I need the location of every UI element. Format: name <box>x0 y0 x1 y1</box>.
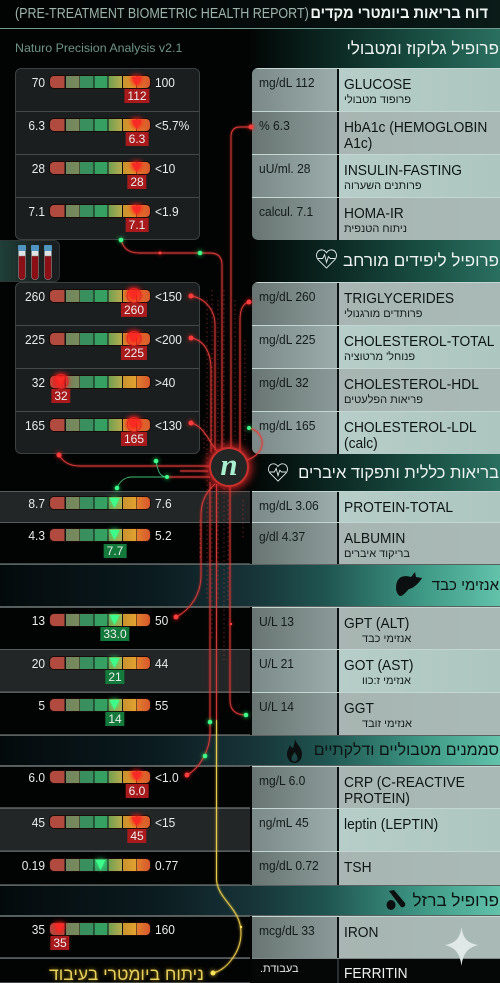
gauge: triglycerides: 260 <box>25 289 45 304</box>
row: GGT: GGT <box>344 701 374 717</box>
row: GGT: U/L 14 <box>259 699 294 714</box>
section header: lipids: פרופיל ליפידים מורחב <box>343 251 499 270</box>
gauge: HOMA-IR <box>28 200 179 232</box>
gauge: HDL <box>16 369 199 412</box>
gauge: leptin: 45 <box>32 815 45 830</box>
table: liver results <box>252 607 500 735</box>
row: protein <box>252 491 500 523</box>
row: LDL: (calc) <box>344 436 378 452</box>
row: albumin <box>252 522 500 564</box>
row: LDL: mg/dL 165 <box>259 418 315 433</box>
section header: general health and organ function: בריאות כללית ותפקוד איברים <box>298 464 499 482</box>
row: HOMA-IR: HOMA-IR <box>344 206 404 222</box>
row: GOT <box>252 649 500 692</box>
gauge: HDL: >40 <box>155 375 175 390</box>
row: GOT: אנזימי ז:כוו <box>362 675 411 687</box>
row: HOMA-IR <box>252 197 500 240</box>
row: total cholesterol: mg/dL 225 <box>259 332 315 347</box>
gauge: leptin: <15 <box>155 815 175 830</box>
section header: metabolic and inflammatory markers: סממנים מטבוליים ודלקתיים <box>314 742 499 759</box>
row: total cholesterol: CHOLESTEROL-TOTAL <box>344 334 494 350</box>
row: albumin: g/dl 4.37 <box>259 529 305 544</box>
gauge: total cholesterol <box>16 326 199 369</box>
gauge: HOMA-IR: 7.1 <box>129 218 145 232</box>
gauge: HDL: 32 <box>32 375 45 390</box>
gauge: albumin <box>0 522 250 564</box>
subtitle: Naturo Precision Analysis v2.1 <box>15 41 182 55</box>
gauge: CRP: 6.0 <box>28 770 45 785</box>
gauge: protein total <box>0 491 250 523</box>
row: CRP <box>252 766 500 808</box>
row: CRP: mg/L 6.0 <box>259 773 305 788</box>
connector dots: red <box>56 124 254 778</box>
row: iron: IRON <box>344 925 378 941</box>
gauge: triglycerides: <150 <box>155 289 182 304</box>
gauge: albumin: 5.2 <box>155 528 172 543</box>
gauge: insulin: 28 <box>32 161 45 176</box>
gauge: GGT <box>0 692 250 735</box>
row: protein: mg/dL 3.06 <box>259 498 319 513</box>
row: GPT <box>252 607 500 650</box>
hub: naturo n logo: n <box>220 447 238 482</box>
gauge: HDL: 32 <box>54 389 68 403</box>
icon: heart pulse <box>268 463 288 482</box>
row: iron <box>252 916 500 958</box>
gauge: leptin <box>0 808 250 851</box>
gauge: CRP: <1.0 <box>155 770 179 785</box>
row: GPT: GPT (ALT) <box>344 616 409 632</box>
row: protein: PROTEIN-TOTAL <box>344 500 453 516</box>
icon: test tubes <box>386 890 406 910</box>
row: albumin: ALBUMIN <box>344 531 405 547</box>
gauge: protein total: 8.7 <box>28 496 45 511</box>
gauge: GOT <box>0 649 250 692</box>
row: triglycerides <box>252 282 500 325</box>
gauge: total cholesterol: 225 <box>25 332 45 347</box>
gauge: GOT: 21 <box>108 670 122 684</box>
panel: lipid gauges <box>15 282 200 454</box>
gauge: insulin: 28 <box>130 175 144 189</box>
row: HbA1c: HbA1c (HEMOGLOBIN <box>344 120 487 136</box>
row: GPT: אנזימי כבד <box>362 633 411 645</box>
row: ferritin pending <box>252 958 500 983</box>
table: iron results <box>252 916 500 958</box>
gauge: TSH <box>0 851 250 885</box>
row: glucose: mg/dL 112 <box>259 75 315 90</box>
row: HDL <box>252 368 500 411</box>
gauge: HOMA-IR: 7.1 <box>28 204 45 219</box>
gauge: HOMA-IR: <1.9 <box>155 204 179 219</box>
gauge: glucose: 100 <box>155 75 175 90</box>
row: insulin: INSULIN-FASTING <box>344 163 462 179</box>
gauge: iron: 35 <box>32 922 45 937</box>
row: leptin <box>252 808 500 851</box>
row: CRP: CRP (C-REACTIVE <box>344 775 465 791</box>
section header: glucose and metabolic <box>250 29 500 68</box>
gauge: LDL: 165 <box>25 418 45 433</box>
row: total cholesterol <box>252 325 500 368</box>
section header: lipids <box>250 240 500 282</box>
panel: glucose gauges <box>15 68 200 240</box>
gauge: insulin <box>16 155 199 198</box>
row: HOMA-IR: ניתוח הטנפית <box>344 223 407 235</box>
gauge: GPT: 50 <box>155 613 168 628</box>
gauge: albumin: 7.7 <box>107 544 123 558</box>
gauge: GPT: 13 <box>32 613 45 628</box>
gauge: glucose <box>16 69 199 112</box>
row: HbA1c <box>252 111 500 154</box>
gauge: GPT <box>0 607 250 650</box>
title bar <box>0 0 500 29</box>
row: insulin: פרותנים השערוה <box>344 180 422 192</box>
gauge: HbA1c <box>16 112 199 155</box>
section header: iron profile: פרופיל ברזל <box>413 891 499 910</box>
gauge: GPT: 33.0 <box>103 627 127 641</box>
row: HbA1c: % 6.3 <box>259 118 290 133</box>
row: TSH <box>252 851 500 885</box>
row: ferritin pending: בעבודת. <box>260 963 299 975</box>
row: insulin <box>252 154 500 197</box>
icon: liver <box>396 572 422 596</box>
gauge: total cholesterol: 225 <box>124 346 144 360</box>
section header: glucose and metabolic: פרופיל גלוקוז ומטבולי <box>346 39 499 58</box>
gauge: TSH: 0.19 <box>22 858 45 873</box>
gauge: TSH: 0.77 <box>155 858 178 873</box>
gauge: leptin: 45 <box>130 829 144 843</box>
gauge: GOT: 20 <box>32 656 45 671</box>
connector dots: yellow <box>210 926 242 976</box>
connector dots: green <box>115 238 251 758</box>
row: HDL: mg/dL 32 <box>259 375 309 390</box>
row: GOT: GOT (AST) <box>344 658 413 674</box>
ferritin row background <box>0 958 250 983</box>
gauge: CRP: 6.0 <box>129 784 145 798</box>
row: LDL <box>252 411 500 454</box>
gauge: LDL: <130 <box>155 418 182 433</box>
gauge: LDL <box>25 412 182 446</box>
table: glucose results <box>252 68 500 240</box>
gauge: total cholesterol: <200 <box>155 332 182 347</box>
gauge: GOT: 44 <box>155 656 168 671</box>
row: ferritin pending: FERRITIN <box>344 966 408 982</box>
gauge: GGT: 14 <box>108 712 122 726</box>
section header: general health and organ function <box>250 454 500 491</box>
gauge: iron: 160 <box>155 922 175 937</box>
icon: blood tubes tab <box>0 240 60 282</box>
gauge: glucose: 70 <box>32 75 45 90</box>
gauge: glucose: 112 <box>127 89 147 103</box>
row: GGT <box>252 692 500 735</box>
row: glucose: GLUCOSE <box>344 77 411 93</box>
icon: sparkle <box>446 928 478 966</box>
row: GOT: U/L 21 <box>259 656 294 671</box>
icon: flame <box>287 740 302 763</box>
gauge: iron: 35 <box>53 936 67 950</box>
row: iron: mcg/dL 33 <box>259 923 315 938</box>
row: LDL: CHOLESTEROL-LDL <box>344 420 477 436</box>
gauge: triglycerides <box>16 283 199 326</box>
row: triglycerides: פרותדים מורגנולי <box>344 308 423 320</box>
table: inflammatory results <box>252 766 500 885</box>
row: total cholesterol: פנוחל' מרטוציה <box>344 351 415 363</box>
gauge: albumin: 4.3 <box>28 528 45 543</box>
gauge: protein total: 7.6 <box>155 496 172 511</box>
row: insulin: uU/ml. 28 <box>259 161 310 176</box>
row: leptin: leptin (LEPTIN) <box>344 817 438 833</box>
gauge: GGT: 5 <box>38 698 45 713</box>
section header: iron profile <box>0 885 500 916</box>
row: glucose: פרופוד מטבולי <box>344 94 411 106</box>
section header: metabolic and inflammatory markers <box>0 735 500 766</box>
row: triglycerides: mg/dL 260 <box>259 289 315 304</box>
hub: naturo n logo <box>209 447 249 487</box>
title: Hebrew: דוח בריאות ביומטרי מקדים <box>310 5 488 22</box>
gauge: HbA1c: 6.3 <box>129 132 145 146</box>
gauge: GGT: 55 <box>155 698 168 713</box>
gauge: triglycerides: 260 <box>124 303 144 317</box>
section header: liver enzymes: אנזימי כבד <box>432 577 499 594</box>
row: HbA1c: A1c) <box>344 136 372 152</box>
section header: liver enzymes <box>0 564 500 607</box>
gauge: insulin: <10 <box>155 161 175 176</box>
row: albumin: בריקוד איברים <box>344 548 410 560</box>
row: HDL: CHOLESTEROL-HDL <box>344 377 479 393</box>
icon: heart pulse <box>316 249 337 269</box>
row: GGT: אנזימי זובד <box>362 718 412 730</box>
gauge: HbA1c: <5.7% <box>155 118 189 133</box>
row: HOMA-IR: calcul. 7.1 <box>259 204 313 219</box>
gauge: HbA1c: 6.3 <box>28 118 45 133</box>
row: TSH: TSH <box>344 860 372 876</box>
row: TSH: mg/dL 0.72 <box>259 858 319 873</box>
gauge: iron <box>0 916 250 958</box>
row: GPT: U/L 13 <box>259 614 294 629</box>
row: HDL: פריאות הפלעטים <box>344 394 423 406</box>
row: triglycerides: TRIGLYCERIDES <box>344 291 454 307</box>
gauge: CRP <box>0 766 250 808</box>
row: leptin: ng/mL 45 <box>259 815 309 830</box>
gauge: LDL: 165 <box>124 432 144 446</box>
row: glucose <box>252 68 500 111</box>
row: CRP: PROTEIN) <box>344 791 410 807</box>
table: organ function results <box>252 491 500 564</box>
table: lipid results <box>252 282 500 454</box>
title: English: (PRE-TREATMENT BIOMETRIC HEALTH REPORT) <box>15 6 309 22</box>
